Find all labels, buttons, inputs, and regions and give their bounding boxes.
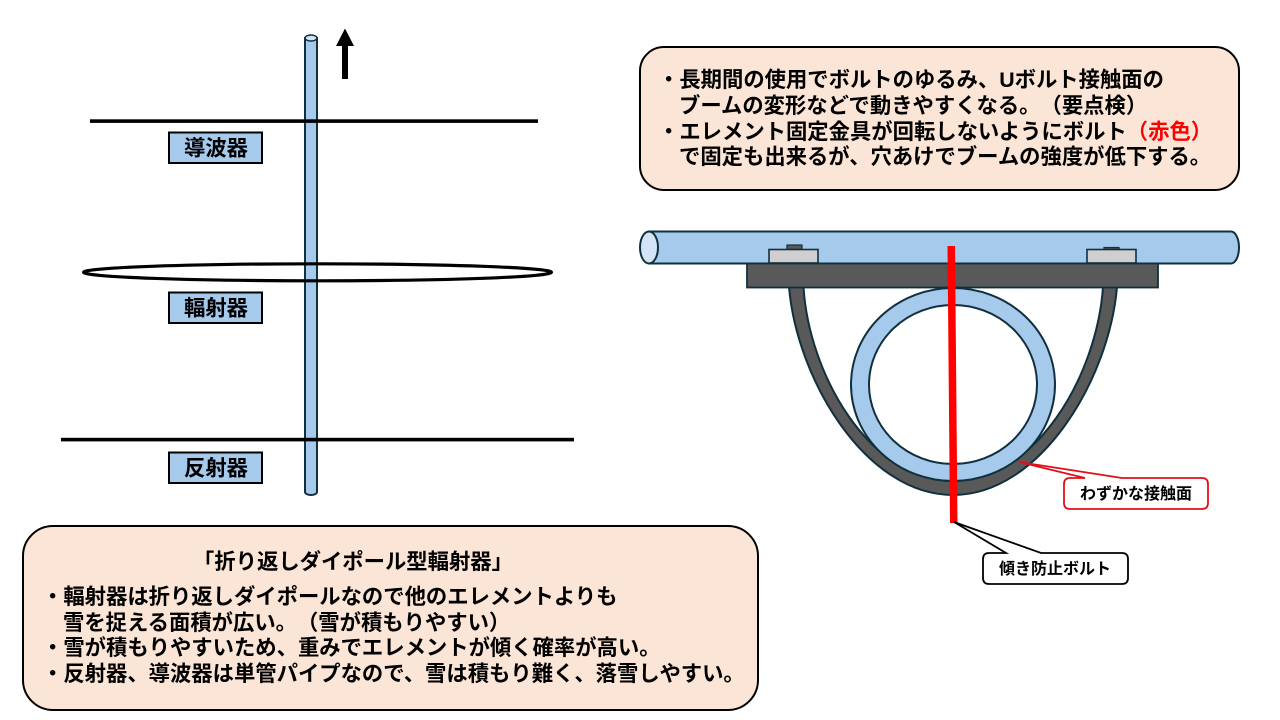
clamp cross-section diagram (640, 232, 1239, 584)
U-bolt (789, 287, 1117, 495)
panel text: ・雪が積もりやすいため、重みでエレメントが傾く確率が高い。 (42, 635, 661, 660)
callout: anti-tilt bolt: 傾き防止ボルト (999, 560, 1111, 578)
notes text: ・長期間の使用でボルトのゆるみ、Uボルト接触面の (658, 68, 1164, 92)
boom pole (305, 35, 317, 495)
panel: folded dipole radiator (23, 526, 758, 710)
panel text: ・輻射器は折り返しダイポールなので他のエレメントよりも (42, 584, 617, 609)
reflector label (169, 452, 262, 483)
callout: slight contact area (1019, 462, 1208, 509)
anti-tilt bolt (red) (948, 246, 958, 523)
notes text: で固定も出来るが、穴あけでブームの強度が低下する。 (679, 144, 1211, 169)
director element (90, 119, 538, 123)
director label (169, 132, 262, 163)
antenna top-view diagram (61, 28, 574, 495)
callout: anti-tilt bolt (954, 522, 1128, 584)
reflector element (61, 438, 574, 441)
boom tube (640, 232, 1239, 264)
notes text: ブームの変形などで動きやすくなる。（要点検） (679, 93, 1147, 118)
element pipe cross-section (851, 288, 1055, 481)
notes text: ・エレメント固定金具が回転しないようにボルト（赤色） (658, 119, 1212, 144)
radiator label: 輻射器 (184, 296, 249, 320)
folded dipole radiator element (84, 264, 552, 281)
U-bolt nut right (1087, 248, 1136, 263)
callout: slight contact area: わずかな接触面 (1080, 485, 1192, 503)
clamp plate (747, 264, 1158, 288)
radiator label (169, 292, 262, 323)
notes text (658, 68, 1212, 169)
panel heading: 「折り返しダイポール型輻射器」 (193, 549, 513, 574)
panel text: ・反射器、導波器は単管パイプなので、雪は積もり難く、落雪しやすい。 (42, 662, 745, 686)
U-bolt nut left (769, 245, 818, 263)
director label: 導波器 (184, 136, 249, 160)
panel text: 雪を捉える面積が広い。（雪が積もりやすい） (63, 610, 510, 635)
panel: inspection notes (640, 47, 1239, 190)
arrow: direction (336, 28, 354, 79)
reflector label: 反射器 (184, 456, 249, 480)
panel text (42, 584, 745, 686)
